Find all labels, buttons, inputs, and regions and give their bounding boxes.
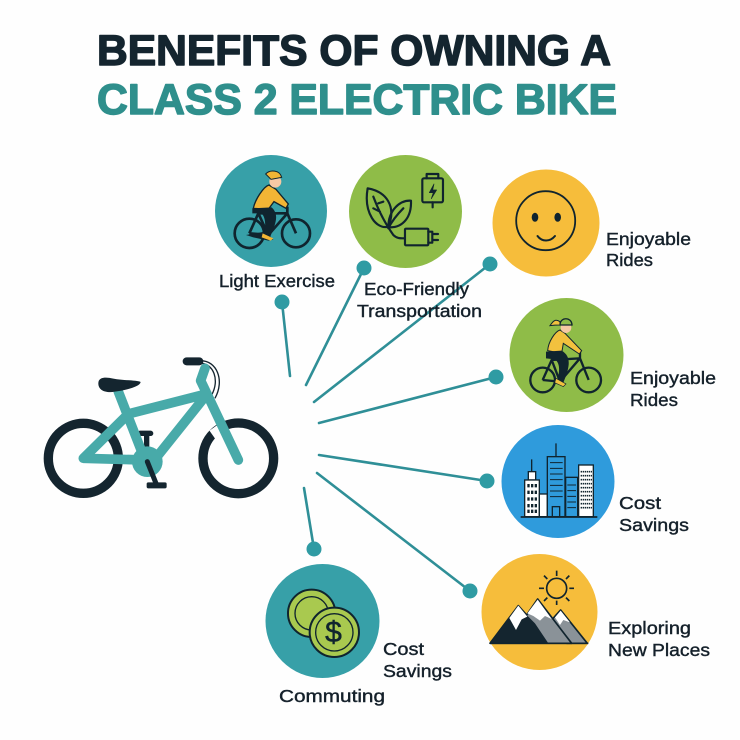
panel: city <box>502 425 689 538</box>
label: enjoyable rides: Rides <box>606 250 653 270</box>
icon: cyclist on teal circle <box>215 155 327 267</box>
label: cost savings: Savings <box>383 661 452 681</box>
label: eco-friendly transportation <box>357 279 482 321</box>
label: enjoyable rides <box>606 229 691 270</box>
label: enjoyable rides: Enjoyable <box>630 368 716 388</box>
title: CLASS 2 ELECTRIC BIKE <box>97 76 617 124</box>
panel: enjoyable rides (smiley) <box>492 170 691 276</box>
label: cost savings: Savings <box>619 515 689 535</box>
panel: eco-friendly transportation <box>349 155 482 321</box>
label: eco-friendly transportation: Transportation <box>357 301 482 321</box>
label: enjoyable rides: Enjoyable <box>606 229 691 249</box>
label: exploring new places: Exploring <box>608 618 691 638</box>
label: exploring new places <box>608 618 710 660</box>
label: cost savings: Cost <box>619 493 661 513</box>
icon: leaves, battery and plug on green circle <box>349 155 462 268</box>
icon: coins on teal circle <box>266 564 380 678</box>
icon: coins on teal circle: $ <box>325 616 342 649</box>
icon: mountains and sun on yellow circle <box>482 554 598 670</box>
icon: woman cyclist on green circle <box>510 298 624 412</box>
label: cost savings <box>619 493 689 535</box>
panel: light exercise <box>215 155 335 291</box>
central bicycle illustration <box>48 357 274 494</box>
label: exploring new places: New Places <box>608 640 710 660</box>
label: commuting: Commuting <box>279 686 385 706</box>
panel: commuting / cost savings <box>266 564 452 706</box>
panel: enjoyable rides (cyclist) <box>510 298 716 412</box>
label: enjoyable rides: Rides <box>630 390 678 410</box>
label: light exercise: Light Exercise <box>219 271 335 291</box>
label: cost savings: Cost <box>383 639 424 659</box>
label: eco-friendly transportation: Eco-Friendly <box>364 279 469 299</box>
label: enjoyable rides <box>630 368 716 410</box>
connector lines <box>274 256 504 598</box>
title <box>97 27 617 124</box>
icon: smiley on yellow circle <box>492 170 600 276</box>
label: cost savings <box>383 639 452 681</box>
panel: exploring new places <box>482 554 710 670</box>
icon: city skyline on blue circle <box>502 425 614 538</box>
title: BENEFITS OF OWNING A <box>97 27 611 75</box>
